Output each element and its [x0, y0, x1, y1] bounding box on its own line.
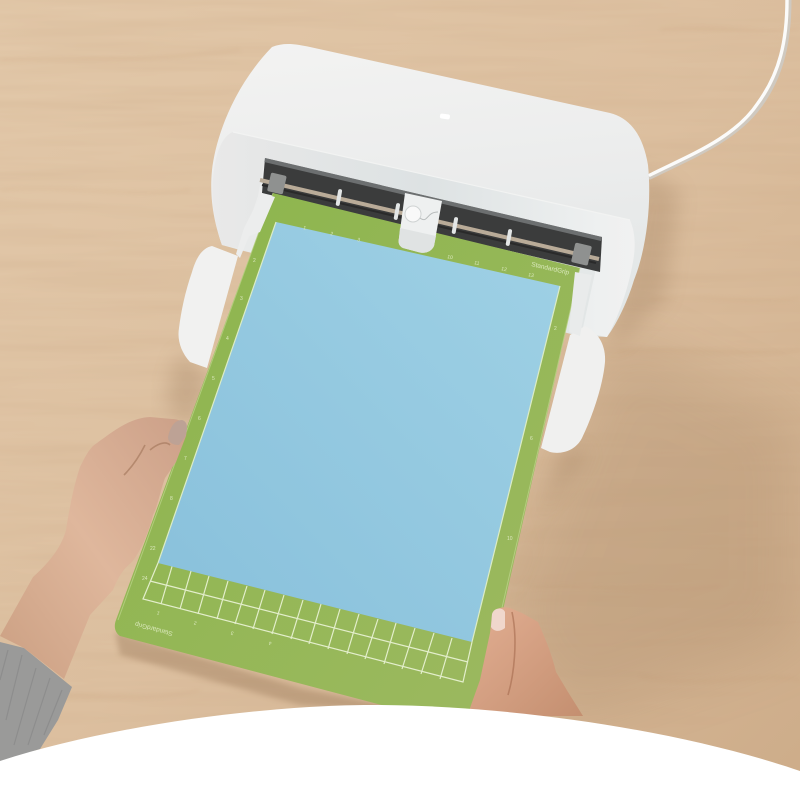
mat base	[115, 193, 580, 730]
mat ruler numbers: 1	[156, 609, 161, 616]
carriage lower shade	[399, 228, 436, 253]
sleeve	[0, 642, 72, 762]
mat edge line	[118, 193, 580, 660]
mat ruler numbers: 7	[184, 456, 187, 462]
finger crease	[508, 612, 515, 695]
mat ruler numbers: 6	[198, 416, 201, 422]
mat ruler numbers: 2	[193, 619, 198, 626]
thumb nail	[168, 420, 187, 445]
cutting machine	[211, 44, 649, 337]
mat ruler numbers: 4	[226, 336, 229, 342]
mat ruler numbers: 8	[170, 496, 173, 502]
carriage curved line	[420, 212, 438, 220]
lid lower lip highlight	[233, 132, 630, 220]
mat ruler numbers: 11	[474, 260, 480, 267]
mat ruler numbers: 2	[330, 231, 334, 238]
grey roller clamps	[267, 172, 592, 266]
mat ruler numbers: 4	[268, 639, 273, 646]
fingernail	[491, 608, 505, 631]
cutting mat	[115, 193, 580, 730]
mat ruler numbers: 10	[447, 254, 454, 261]
lower roller rail	[262, 185, 596, 263]
mat ruler numbers: 3	[230, 629, 235, 636]
hand and forearm	[0, 417, 186, 679]
mat ruler numbers	[142, 225, 557, 646]
carriage knob	[405, 206, 421, 222]
mat ruler numbers: 13	[528, 272, 535, 279]
mat ruler numbers: 2	[554, 326, 557, 332]
mat ruler numbers: 24	[142, 576, 148, 582]
mat ruler numbers: 3	[357, 237, 361, 244]
status light	[440, 113, 450, 120]
carriage block	[399, 193, 442, 253]
paper edge highlight	[158, 222, 560, 642]
mat ruler numbers: 12	[501, 266, 508, 273]
mat ruler numbers: 22	[150, 546, 156, 552]
mat measuring grid	[143, 563, 472, 682]
mat ruler numbers: 2	[253, 258, 256, 264]
mat label bottom left, upside down: StandardGrip	[134, 620, 174, 637]
steel roller rail	[260, 180, 599, 259]
mat ruler numbers: 6	[530, 436, 533, 442]
shadows cast on the desk	[115, 170, 800, 720]
cutting carriage	[399, 193, 442, 253]
blue paper sheet	[158, 222, 560, 642]
power cable	[650, 0, 789, 177]
finger crease	[124, 443, 170, 475]
right hand	[470, 607, 583, 716]
mat ruler numbers: 1	[303, 225, 307, 232]
white rail clips	[335, 189, 512, 246]
machine opening	[262, 158, 602, 272]
right paper guide	[569, 272, 592, 336]
palm and fingers	[470, 607, 583, 716]
right extension tray	[541, 326, 605, 453]
left extension tray	[178, 246, 238, 368]
mat ruler numbers: 10	[507, 536, 513, 542]
machine body shell	[211, 44, 649, 337]
mat ruler numbers: 3	[240, 296, 243, 302]
mat ruler numbers: 5	[212, 376, 215, 382]
white curved bottom panel	[0, 705, 800, 800]
front face of the lid and side arms	[213, 132, 635, 337]
left hand	[0, 417, 187, 762]
lower lid band	[264, 158, 602, 241]
left paper guide	[236, 193, 275, 258]
mat label top right: StandardGrip	[531, 261, 570, 277]
